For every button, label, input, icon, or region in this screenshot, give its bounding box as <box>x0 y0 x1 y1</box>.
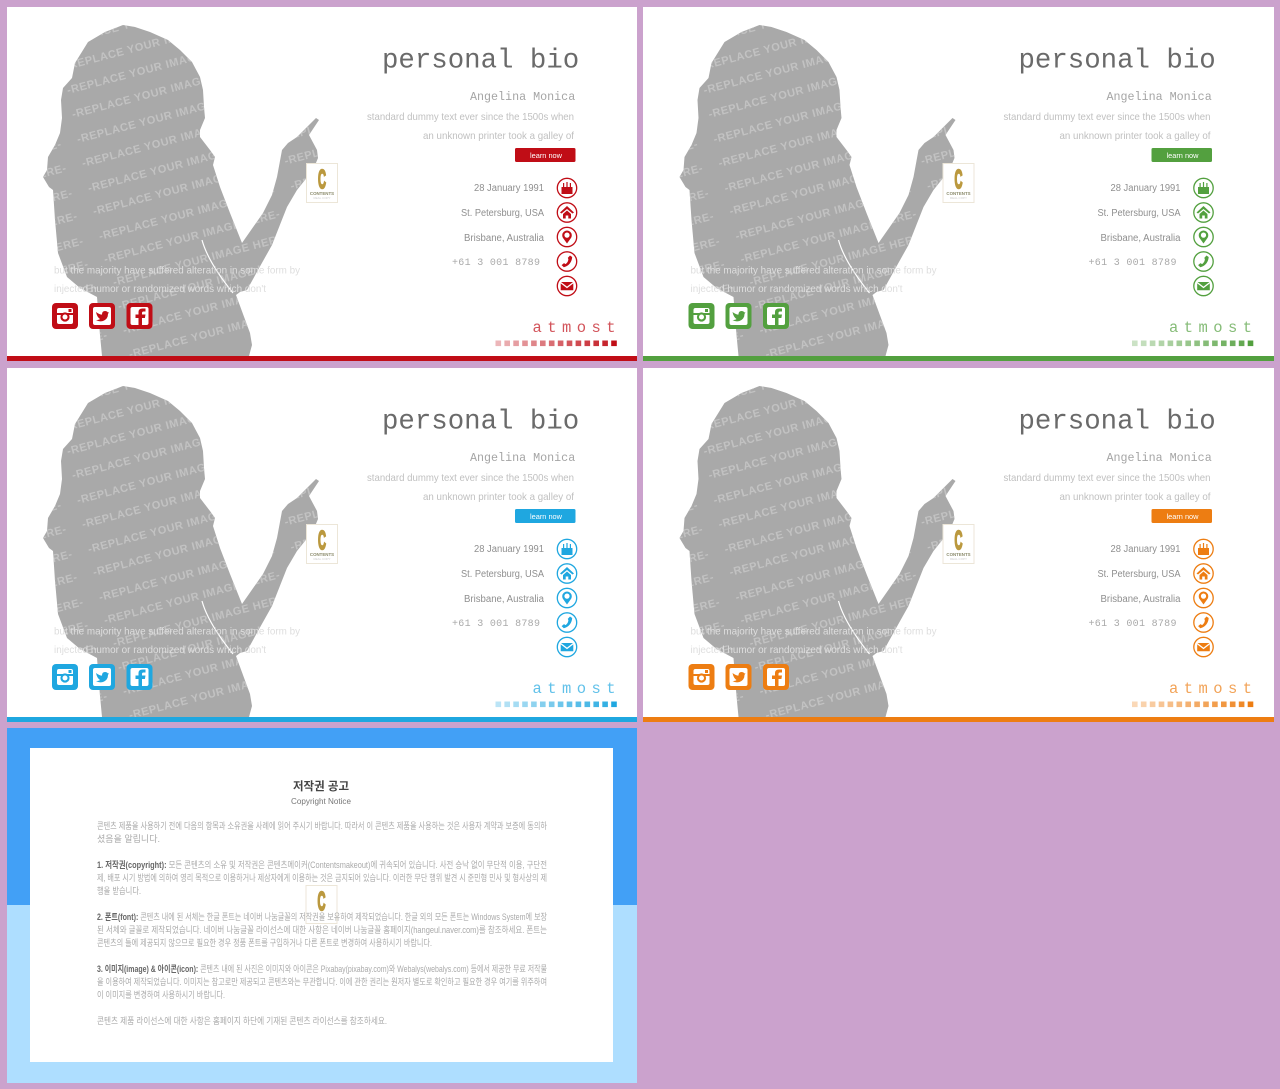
contact details: St. Petersburg, USA <box>461 569 544 580</box>
heading: copyright notice <box>291 779 351 806</box>
icon: cake <box>557 178 577 198</box>
logo: REAL COPY <box>950 196 967 200</box>
icon: facebook <box>763 303 789 329</box>
silhouette placeholder image: -REPLACE YOUR IMAGE HERE- <box>689 328 868 386</box>
description: standard dummy text ever since the 1500s when <box>367 111 574 123</box>
logo: REAL COPY <box>313 557 331 561</box>
contact details: St. Petersburg, USA <box>1098 569 1181 580</box>
logo <box>306 886 337 924</box>
silhouette placeholder image: -REPLACE YOUR IMAGE HERE- <box>728 521 907 579</box>
icon: cake <box>1194 178 1213 198</box>
logo: CONTENTS <box>310 191 334 196</box>
logo: C <box>318 164 326 194</box>
silhouette placeholder image: -REPLACE YOUR IMAGE HERE- <box>700 376 879 434</box>
icon: location pin <box>1194 588 1213 608</box>
silhouette placeholder image: -REPLACE YOUR IMAGE HERE- <box>940 542 1119 600</box>
contact details: Brisbane, Australia <box>464 233 544 244</box>
brand: atmost: atmost <box>532 680 616 698</box>
icon: phone <box>557 252 577 271</box>
contact details: St. Petersburg, USA <box>461 208 544 219</box>
silhouette placeholder image: -REPLACE YOUR IMAGE HERE- <box>521 138 700 196</box>
contact details: Brisbane, Australia <box>464 594 544 605</box>
silhouette placeholder image: -REPLACE YOUR IMAGE HERE- <box>128 664 307 722</box>
silhouette placeholder image: -REPLACE YOUR IMAGE HERE- <box>509 426 688 484</box>
button: learn now <box>1152 148 1212 162</box>
silhouette placeholder image: -REPLACE YOUR IMAGE HERE- <box>516 474 695 532</box>
icon: location pin <box>557 588 577 608</box>
progress squares <box>496 702 617 707</box>
silhouette placeholder image: -REPLACE YOUR IMAGE HERE- <box>66 400 245 458</box>
button: learn now <box>1152 509 1212 523</box>
copyright body text: 된 서체와 글꼴로 제작되었습니다. 네이버 나눔글꼴 라이선스에 대한 사항은 네이버 나눔글꼴 홈페이지(hangeul.naver.com)를 참조하세요. 폰트는 <box>97 924 547 935</box>
silhouette placeholder image: -REPLACE YOUR IMAGE HERE- <box>707 424 886 482</box>
logo: C <box>318 525 326 555</box>
silhouette placeholder image: -REPLACE YOUR IMAGE HERE- <box>940 181 1119 239</box>
progress squares <box>1132 340 1253 346</box>
silhouette placeholder image: -REPLACE YOUR IMAGE HERE- <box>573 353 752 411</box>
silhouette placeholder image: -REPLACE YOUR IMAGE HERE- <box>244 278 423 336</box>
silhouette placeholder image: -REPLACE YOUR IMAGE HERE- <box>71 63 250 121</box>
silhouette placeholder image: -REPLACE YOUR IMAGE HERE- <box>511 89 690 147</box>
silhouette placeholder image: -REPLACE YOUR IMAGE HERE- <box>753 255 932 313</box>
logo: CONTENTS <box>946 552 971 557</box>
copyright body text: 2. 폰트(font): 콘텐츠 내에 된 서체는 한글 폰트는 네이버 나눔글꼴의 저작권을 보유하여 제작되었습니다. 한글 외의 모든 폰트는 Windows System에 보장 <box>97 911 547 922</box>
silhouette placeholder image: -REPLACE YOUR IMAGE HERE- <box>945 566 1124 624</box>
silhouette placeholder image: -REPLACE YOUR IMAGE HERE- <box>92 521 271 579</box>
silhouette placeholder image: -REPLACE YOUR IMAGE HERE- <box>926 496 1105 554</box>
overlay text: but the majority have suffered alteration in some form by <box>54 626 301 638</box>
silhouette placeholder image: -REPLACE YOUR IMAGE HERE- <box>267 38 446 96</box>
silhouette placeholder image: -REPLACE YOUR IMAGE HERE- <box>87 137 266 195</box>
silhouette placeholder image: -REPLACE YOUR IMAGE HERE- <box>308 566 487 624</box>
icon: house <box>557 203 577 222</box>
name: Angelina Monica <box>470 451 575 465</box>
silhouette placeholder image: -REPLACE YOUR IMAGE HERE- <box>904 399 1083 457</box>
icon: mail <box>1194 276 1213 296</box>
silhouette placeholder image: -REPLACE YOUR IMAGE HERE- <box>894 350 1073 408</box>
silhouette placeholder image: -REPLACE YOUR IMAGE HERE- <box>915 87 1094 145</box>
silhouette placeholder image: -REPLACE YOUR IMAGE HERE- <box>87 498 266 556</box>
panel: copyright notice <box>7 728 637 1083</box>
silhouette placeholder image: -REPLACE YOUR IMAGE HERE- <box>956 614 1135 672</box>
silhouette placeholder image: -REPLACE YOUR IMAGE HERE- <box>98 185 277 243</box>
description <box>1004 472 1211 503</box>
icon: house <box>557 564 577 583</box>
silhouette placeholder image: -REPLACE YOUR IMAGE HERE- <box>748 231 927 289</box>
button: learn now <box>515 148 576 162</box>
silhouette placeholder image: -REPLACE YOUR IMAGE HERE- <box>103 208 282 266</box>
panel: personal bio blue <box>7 368 637 722</box>
button: learn now: learn now <box>1166 514 1199 521</box>
silhouette placeholder image: -REPLACE YOUR IMAGE HERE- <box>537 210 716 268</box>
silhouette placeholder image <box>43 386 319 717</box>
overlay text <box>690 264 937 295</box>
silhouette placeholder image: -REPLACE YOUR IMAGE HERE- <box>557 281 736 339</box>
button: learn now: learn now <box>530 153 563 160</box>
silhouette placeholder image: -REPLACE YOUR IMAGE HERE- <box>272 62 451 120</box>
silhouette placeholder image: -REPLACE YOUR IMAGE HERE- <box>758 279 937 337</box>
silhouette placeholder image: -REPLACE YOUR IMAGE HERE- <box>764 664 943 722</box>
silhouette placeholder image: -REPLACE YOUR IMAGE HERE- <box>956 253 1135 311</box>
contact details: St. Petersburg, USA <box>1098 208 1181 219</box>
icon: mail <box>557 276 577 296</box>
brand: atmost: atmost <box>532 319 616 337</box>
contact details: +61 3 001 8789 <box>452 258 540 269</box>
silhouette placeholder image: -REPLACE YOUR IMAGE HERE- <box>498 378 677 436</box>
description: an unknown printer took a galley of <box>423 491 574 503</box>
silhouette placeholder image: -REPLACE YOUR IMAGE HERE- <box>702 39 881 97</box>
overlay text: injected humor or randomized words which don't <box>690 283 903 295</box>
silhouette placeholder image <box>43 25 319 356</box>
copyright body text: 콘텐츠 제품 라이선스에 대한 사항은 홈페이지 하단에 기재된 콘텐츠 라이선스를 참조하세요. <box>97 1015 387 1026</box>
copyright body text: 콘텐츠의 틀에 제공되지 않으므로 필요한 경우 정품 폰트를 구입하거나 다른 폰트로 변경하여 사용하시기 바랍니다. <box>97 937 432 948</box>
icon: phone <box>557 613 577 632</box>
social icons <box>52 664 152 690</box>
button: learn now: learn now <box>1166 153 1199 160</box>
silhouette placeholder image: -REPLACE YOUR IMAGE HERE- <box>562 305 741 363</box>
description <box>367 111 574 142</box>
description: standard dummy text ever since the 1500s when <box>367 472 574 484</box>
silhouette placeholder image: -REPLACE YOUR IMAGE HERE- <box>308 205 487 263</box>
description: an unknown printer took a galley of <box>423 130 574 142</box>
bottom accent bar <box>643 717 1274 722</box>
icon: instagram <box>52 303 78 329</box>
silhouette placeholder image: -REPLACE YOUR IMAGE HERE- <box>881 278 1060 336</box>
contact details: +61 3 001 8789 <box>1088 619 1176 630</box>
button: learn now: learn now <box>530 514 563 521</box>
panel: personal bio red <box>7 7 637 361</box>
silhouette placeholder image: -REPLACE YOUR IMAGE HERE- <box>81 473 260 531</box>
silhouette placeholder image: -REPLACE YOUR IMAGE HERE- <box>548 619 727 677</box>
silhouette placeholder image: -REPLACE YOUR IMAGE HERE- <box>712 449 891 507</box>
silhouette placeholder image: -REPLACE YOUR IMAGE HERE- <box>122 279 301 337</box>
silhouette placeholder image: -REPLACE YOUR IMAGE HERE- <box>294 158 473 216</box>
logo: CONTENTS <box>946 191 971 196</box>
brand: atmost: atmost <box>1169 680 1252 698</box>
silhouette placeholder image: -REPLACE YOUR IMAGE HERE- <box>950 229 1129 287</box>
overlay text: injected humor or randomized words which don't <box>690 644 903 656</box>
silhouette placeholder image: -REPLACE YOUR IMAGE HERE- <box>712 88 891 146</box>
logo <box>943 524 974 564</box>
bottom accent bar <box>643 356 1274 361</box>
logo <box>306 164 338 202</box>
silhouette placeholder image: -REPLACE YOUR IMAGE HERE- <box>557 642 736 700</box>
contact details <box>1088 544 1181 630</box>
contact icons <box>557 539 577 657</box>
contact details: 28 January 1991 <box>474 544 544 555</box>
silhouette placeholder image: -REPLACE YOUR IMAGE HERE- <box>64 376 243 434</box>
silhouette placeholder image: -REPLACE YOUR IMAGE HERE- <box>504 402 683 460</box>
description <box>367 472 574 503</box>
button: learn now <box>515 509 576 523</box>
silhouette placeholder image: -REPLACE YOUR IMAGE HERE- <box>66 39 245 97</box>
contact details: +61 3 001 8789 <box>1088 258 1176 269</box>
icon: phone <box>1194 252 1213 271</box>
silhouette placeholder image: -REPLACE YOUR IMAGE HERE- <box>748 592 927 650</box>
silhouette placeholder image: -REPLACE YOUR IMAGE HERE- <box>53 328 232 386</box>
icon: instagram <box>52 664 78 690</box>
heading: copyright notice: Copyright Notice <box>291 796 351 806</box>
silhouette placeholder image: -REPLACE YOUR IMAGE HERE- <box>504 41 683 99</box>
logo: REAL COPY <box>313 196 331 200</box>
silhouette placeholder image: -REPLACE YOUR IMAGE HERE- <box>498 17 677 75</box>
silhouette placeholder image: -REPLACE YOUR IMAGE HERE- <box>573 714 752 772</box>
silhouette placeholder image: -REPLACE YOUR IMAGE HERE- <box>59 352 238 410</box>
silhouette placeholder image: -REPLACE YOUR IMAGE HERE- <box>562 666 741 724</box>
logo: CONTENTS <box>310 552 334 557</box>
contact icons <box>1194 539 1213 657</box>
icon: twitter <box>89 664 115 690</box>
overlay text: injected humor or randomized words which don't <box>54 644 266 656</box>
silhouette placeholder image: -REPLACE YOUR IMAGE HERE- <box>511 450 690 508</box>
overlay text: but the majority have suffered alteration in some form by <box>690 626 937 638</box>
panel: personal bio orange <box>643 368 1274 722</box>
silhouette placeholder image: -REPLACE YOUR IMAGE HERE- <box>64 15 243 73</box>
silhouette placeholder image: -REPLACE YOUR IMAGE HERE- <box>81 112 260 170</box>
silhouette placeholder image: -REPLACE YOUR IMAGE HERE- <box>313 229 492 287</box>
name: Angelina Monica <box>1106 451 1212 465</box>
silhouette placeholder image: -REPLACE YOUR IMAGE HERE- <box>71 424 250 482</box>
silhouette placeholder image: -REPLACE YOUR IMAGE HERE- <box>892 326 1071 384</box>
silhouette placeholder image <box>680 25 956 356</box>
icon: cake <box>557 539 577 559</box>
icon: cake <box>1194 539 1213 559</box>
copyright body text: 행을 받습니다. <box>97 885 141 896</box>
silhouette placeholder image: -REPLACE YOUR IMAGE HERE- <box>887 302 1066 360</box>
contact details: 28 January 1991 <box>474 183 544 194</box>
social icons <box>52 303 152 329</box>
silhouette placeholder image: -REPLACE YOUR IMAGE HERE- <box>700 15 879 73</box>
icon: facebook <box>763 664 789 690</box>
icon: facebook <box>126 303 152 329</box>
icon: phone <box>1194 613 1213 632</box>
silhouette placeholder image: -REPLACE YOUR IMAGE HERE- <box>250 302 429 360</box>
copyright body text: 이 이미지를 변경하여 사용하시기 바랍니다. <box>97 989 225 1000</box>
silhouette placeholder image: -REPLACE YOUR IMAGE HERE- <box>319 614 498 672</box>
silhouette placeholder image: -REPLACE YOUR IMAGE HERE- <box>257 350 436 408</box>
logo: C <box>954 525 963 555</box>
overlay text: injected humor or randomized words which don't <box>54 283 266 295</box>
icon: instagram <box>688 303 714 329</box>
description: an unknown printer took a galley of <box>1060 491 1211 503</box>
name: Angelina Monica <box>470 90 575 104</box>
copyright body text: 1. 저작권(copyright): 모든 콘텐츠의 소유 및 저작권은 콘텐츠메이커(Contentsmakeout)에 귀속되어 있습니다. 사전 승낙 없이 무단적 이용, 구단전 <box>97 859 547 870</box>
silhouette placeholder image: -REPLACE YOUR IMAGE HERE- <box>707 63 886 121</box>
icon: location pin <box>1194 227 1213 247</box>
silhouette placeholder image: -REPLACE YOUR IMAGE HERE- <box>695 352 874 410</box>
overlay text: but the majority have suffered alteration in some form by <box>54 264 301 276</box>
silhouette placeholder image: -REPLACE YOUR IMAGE HERE- <box>313 590 492 648</box>
copyright body text: 콘텐츠 제품을 사용하기 전에 다음의 항목과 소유권을 사례에 읽어 주시기 바랍니다. 따라서 이 콘텐츠 제품을 사용하는 것은 사용자 계약과 보증에 동의하 <box>97 820 547 831</box>
silhouette placeholder image: -REPLACE YOUR IMAGE HERE- <box>909 423 1088 481</box>
silhouette placeholder image: -REPLACE YOUR IMAGE HERE- <box>521 499 700 557</box>
silhouette placeholder image: -REPLACE YOUR IMAGE HERE- <box>764 303 943 361</box>
contact details <box>1088 183 1181 269</box>
icon: location pin <box>557 227 577 247</box>
icon: twitter <box>726 664 752 690</box>
silhouette placeholder image: -REPLACE YOUR IMAGE HERE- <box>920 471 1099 529</box>
contact details <box>452 544 544 630</box>
silhouette placeholder image: -REPLACE YOUR IMAGE HERE- <box>262 374 441 432</box>
silhouette placeholder image: -REPLACE YOUR IMAGE HERE- <box>567 690 746 748</box>
logo: REAL COPY <box>950 557 967 561</box>
silhouette placeholder image: -REPLACE YOUR IMAGE HERE- <box>283 471 462 529</box>
silhouette placeholder image: -REPLACE YOUR IMAGE HERE- <box>278 448 457 506</box>
silhouette placeholder image: -REPLACE YOUR IMAGE HERE- <box>931 519 1110 577</box>
bottom accent bar <box>7 717 637 722</box>
silhouette placeholder image: -REPLACE YOUR IMAGE HERE- <box>734 185 913 243</box>
icon: house <box>1194 564 1213 583</box>
title: personal bio <box>382 46 579 76</box>
silhouette placeholder image: -REPLACE YOUR IMAGE HERE- <box>723 498 902 556</box>
silhouette placeholder image: -REPLACE YOUR IMAGE HERE- <box>548 258 727 316</box>
social icons <box>688 664 789 690</box>
social icons <box>688 303 789 329</box>
silhouette placeholder image: -REPLACE YOUR IMAGE HERE- <box>294 519 473 577</box>
contact details <box>452 183 544 269</box>
silhouette placeholder image: -REPLACE YOUR IMAGE HERE- <box>509 65 688 123</box>
silhouette placeholder image: -REPLACE YOUR IMAGE HERE- <box>98 546 277 604</box>
silhouette placeholder image: -REPLACE YOUR IMAGE HERE- <box>739 569 918 627</box>
silhouette placeholder image: -REPLACE YOUR IMAGE HERE- <box>112 231 291 289</box>
bottom accent bar <box>7 356 637 361</box>
panel: personal bio green <box>643 7 1274 361</box>
heading: copyright notice: 저작권 공고 <box>293 779 349 793</box>
icon: mail <box>557 637 577 657</box>
silhouette placeholder image: -REPLACE YOUR IMAGE HERE- <box>920 110 1099 168</box>
silhouette placeholder image: -REPLACE YOUR IMAGE HERE- <box>537 571 716 629</box>
silhouette placeholder image: -REPLACE YOUR IMAGE HERE- <box>117 255 296 313</box>
silhouette placeholder image: -REPLACE YOUR IMAGE HERE- <box>128 303 307 361</box>
silhouette placeholder image: -REPLACE YOUR IMAGE HERE- <box>526 523 705 581</box>
silhouette placeholder image: -REPLACE YOUR IMAGE HERE- <box>303 181 482 239</box>
icon: house <box>1194 203 1213 222</box>
silhouette placeholder image: -REPLACE YOUR IMAGE HERE- <box>532 548 711 606</box>
silhouette placeholder image: -REPLACE YOUR IMAGE HERE- <box>543 596 722 654</box>
progress squares <box>496 340 617 346</box>
silhouette placeholder image: -REPLACE YOUR IMAGE HERE- <box>702 400 881 458</box>
silhouette placeholder image: -REPLACE YOUR IMAGE HERE- <box>303 542 482 600</box>
silhouette placeholder image <box>680 386 956 717</box>
description <box>1004 111 1211 142</box>
brand: atmost: atmost <box>1169 319 1252 337</box>
silhouette placeholder image: -REPLACE YOUR IMAGE HERE- <box>516 113 695 171</box>
silhouette placeholder image: -REPLACE YOUR IMAGE HERE- <box>945 205 1124 263</box>
silhouette placeholder image: -REPLACE YOUR IMAGE HERE- <box>904 38 1083 96</box>
contact details: +61 3 001 8789 <box>452 619 540 630</box>
contact icons <box>1194 178 1213 296</box>
silhouette placeholder image: -REPLACE YOUR IMAGE HERE- <box>319 253 498 311</box>
name: Angelina Monica <box>1106 90 1212 104</box>
overlay text <box>690 626 937 656</box>
overlay text: but the majority have suffered alteration in some form by <box>690 264 937 276</box>
icon: mail <box>1194 637 1213 657</box>
silhouette placeholder image: -REPLACE YOUR IMAGE HERE- <box>567 329 746 387</box>
silhouette placeholder image: -REPLACE YOUR IMAGE HERE- <box>717 473 896 531</box>
silhouette placeholder image: -REPLACE YOUR IMAGE HERE- <box>76 88 255 146</box>
icon: twitter <box>89 303 115 329</box>
silhouette placeholder image: -REPLACE YOUR IMAGE HERE- <box>758 640 937 698</box>
silhouette placeholder image: -REPLACE YOUR IMAGE HERE- <box>267 399 446 457</box>
silhouette placeholder image: -REPLACE YOUR IMAGE HERE- <box>526 162 705 220</box>
progress squares <box>1132 702 1253 707</box>
silhouette placeholder image: -REPLACE YOUR IMAGE HERE- <box>931 158 1110 216</box>
overlay text <box>54 264 301 295</box>
silhouette placeholder image: -REPLACE YOUR IMAGE HERE- <box>909 62 1088 120</box>
silhouette placeholder image: -REPLACE YOUR IMAGE HERE- <box>543 235 722 293</box>
silhouette placeholder image: -REPLACE YOUR IMAGE HERE- <box>117 616 296 674</box>
silhouette placeholder image: -REPLACE YOUR IMAGE HERE- <box>728 160 907 218</box>
silhouette placeholder image: -REPLACE YOUR IMAGE HERE- <box>103 569 282 627</box>
contact details: 28 January 1991 <box>1110 544 1181 555</box>
silhouette placeholder image: -REPLACE YOUR IMAGE HERE- <box>262 13 441 71</box>
silhouette placeholder image: -REPLACE YOUR IMAGE HERE- <box>122 640 301 698</box>
title: personal bio <box>1018 406 1216 438</box>
contact details: 28 January 1991 <box>1110 183 1181 194</box>
description: standard dummy text ever since the 1500s when <box>1004 111 1211 123</box>
contact icons <box>557 178 577 296</box>
silhouette placeholder image: -REPLACE YOUR IMAGE HERE- <box>278 87 457 145</box>
icon: instagram <box>688 664 714 690</box>
silhouette placeholder image: -REPLACE YOUR IMAGE HERE- <box>950 590 1129 648</box>
icon: facebook <box>126 664 152 690</box>
logo: C <box>318 886 326 916</box>
silhouette placeholder image: -REPLACE YOUR IMAGE HERE- <box>734 546 913 604</box>
description: standard dummy text ever since the 1500s when <box>1004 472 1211 484</box>
silhouette placeholder image: -REPLACE YOUR IMAGE HERE- <box>289 135 468 193</box>
silhouette placeholder image: -REPLACE YOUR IMAGE HERE- <box>255 326 434 384</box>
silhouette placeholder image: -REPLACE YOUR IMAGE HERE- <box>723 137 902 195</box>
silhouette placeholder image: -REPLACE YOUR IMAGE HERE- <box>717 112 896 170</box>
description: an unknown printer took a galley of <box>1060 130 1211 142</box>
silhouette placeholder image: -REPLACE YOUR IMAGE HERE- <box>899 374 1078 432</box>
title: personal bio <box>1018 46 1216 76</box>
silhouette placeholder image: -REPLACE YOUR IMAGE HERE- <box>76 449 255 507</box>
copyright body text: 제, 배포 시기 방법에 의하여 영리 목적으로 이용하거나 제삼자에게 이용하는 것은 금지되어 있습니다. 이러한 무단 행위 발견 시 준민형 민사 및 형사상의 제 <box>97 872 547 883</box>
logo: C <box>954 164 963 194</box>
silhouette placeholder image: -REPLACE YOUR IMAGE HERE- <box>289 496 468 554</box>
silhouette placeholder image: -REPLACE YOUR IMAGE HERE- <box>92 160 271 218</box>
silhouette placeholder image: -REPLACE YOUR IMAGE HERE- <box>899 13 1078 71</box>
copyright body text: 3. 이미지(image) & 아이콘(icon): 콘텐츠 내에 된 사진은 이미지와 아이콘은 Pixabay(pixabay.com)와 Webalys(webalys.com) 등에서 제공한 무료 저작물 <box>97 963 547 974</box>
silhouette placeholder image: -REPLACE YOUR IMAGE HERE- <box>915 448 1094 506</box>
silhouette placeholder image: -REPLACE YOUR IMAGE HERE- <box>283 110 462 168</box>
silhouette placeholder image: -REPLACE YOUR IMAGE HERE- <box>112 592 291 650</box>
contact details: Brisbane, Australia <box>1100 233 1181 244</box>
silhouette placeholder image: -REPLACE YOUR IMAGE HERE- <box>272 423 451 481</box>
silhouette placeholder image: -REPLACE YOUR IMAGE HERE- <box>926 135 1105 193</box>
contact details: Brisbane, Australia <box>1100 594 1181 605</box>
title: personal bio <box>382 406 579 438</box>
silhouette placeholder image: -REPLACE YOUR IMAGE HERE- <box>532 187 711 245</box>
logo <box>943 164 974 202</box>
overlay text <box>54 626 301 656</box>
copyright body text: 을 이용하여 제작되었습니다. 이미지는 참고로만 제공되고 콘텐츠와는 무관합니다. 이에 관한 권리는 원저자 별도로 확인하고 필요한 경우 여기를 위주하여 <box>97 976 547 987</box>
copyright body text: 셨음을 알립니다. <box>97 834 160 844</box>
icon: twitter <box>726 303 752 329</box>
silhouette placeholder image: -REPLACE YOUR IMAGE HERE- <box>739 208 918 266</box>
copyright body text <box>97 820 547 1026</box>
logo <box>306 524 338 564</box>
silhouette placeholder image: -REPLACE YOUR IMAGE HERE- <box>753 616 932 674</box>
